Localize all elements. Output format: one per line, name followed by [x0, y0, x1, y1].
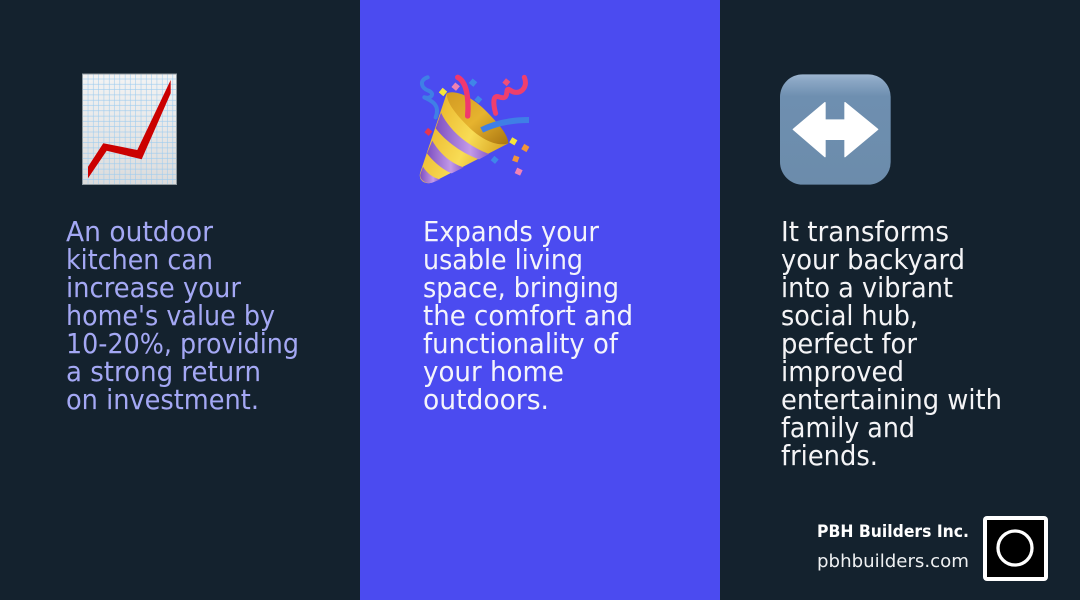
- text: living space: the comfort and: [423, 300, 633, 332]
- icon: chart with upward trend: [82, 74, 176, 184]
- panel: centre background: [360, 0, 720, 600]
- text: social hub: improved: [781, 356, 904, 388]
- text: living space: space, bringing: [423, 272, 619, 304]
- panel: left background: [0, 0, 360, 600]
- text: living space: your home: [423, 356, 564, 388]
- text: home value: An outdoor: [66, 216, 214, 248]
- text: living space: usable living: [423, 244, 583, 276]
- icon: logo: [983, 516, 1048, 581]
- text: home value: increase your: [66, 272, 242, 304]
- icon: left-right arrow: [780, 74, 891, 185]
- text: home value: kitchen can: [66, 244, 213, 276]
- footer: website: pbhbuilders.com: [817, 552, 969, 572]
- text: home value: a strong return: [66, 356, 261, 388]
- icon: party popper: [420, 77, 529, 183]
- text: social hub: family and: [781, 412, 915, 444]
- text: home value: on investment.: [66, 384, 259, 416]
- text: home value: home's value by: [66, 300, 275, 332]
- text: home value: 10-20%, providing: [66, 328, 299, 360]
- text: living space: Expands your: [423, 216, 600, 248]
- text: home value: [66, 216, 299, 416]
- text: social hub: friends.: [781, 440, 878, 472]
- panel: right background: [720, 0, 1080, 600]
- text: social hub: entertaining with: [781, 384, 1002, 416]
- text: living space: functionality of: [423, 328, 619, 360]
- text: social hub: perfect for: [781, 328, 918, 360]
- text: social hub: your backyard: [781, 244, 965, 276]
- text: living space: outdoors.: [423, 384, 549, 416]
- footer: brand name: PBH Builders Inc.: [817, 522, 969, 541]
- text: living space: [423, 216, 633, 416]
- text: social hub: [781, 216, 1002, 472]
- text: social hub: social hub,: [781, 300, 918, 332]
- text: social hub: into a vibrant: [781, 272, 953, 304]
- text: social hub: It transforms: [781, 216, 949, 248]
